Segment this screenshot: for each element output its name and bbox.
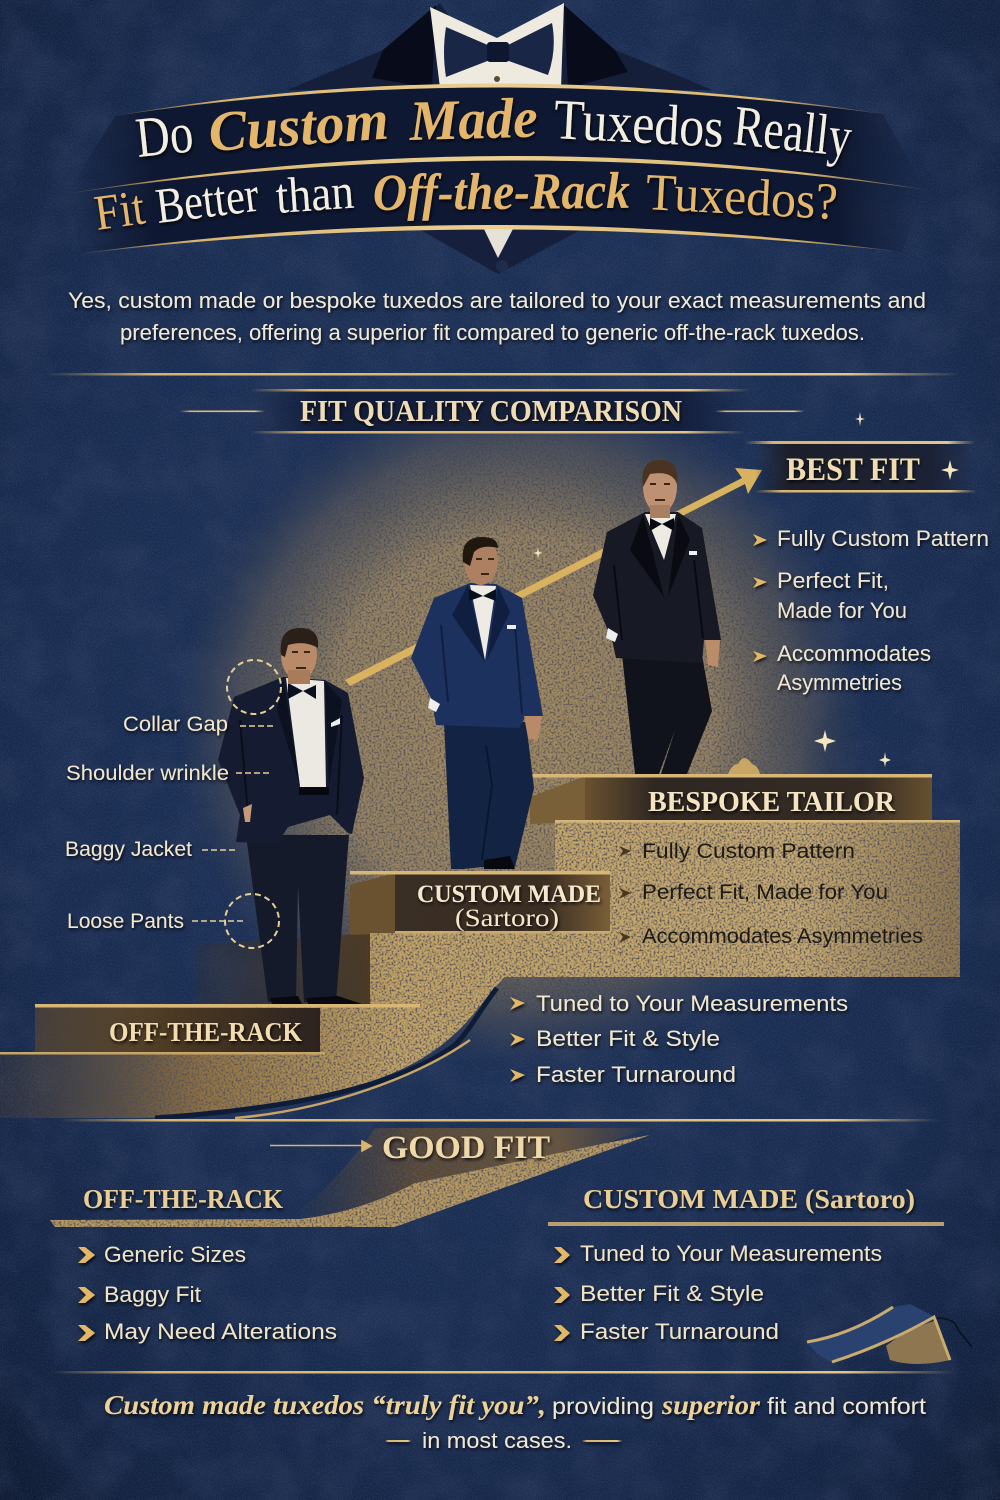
bottom divider — [50, 1371, 955, 1374]
list: Baggy Fit — [104, 1282, 201, 1307]
custom made list: Faster Turnaround — [536, 1062, 736, 1087]
title text: Fit — [91, 178, 148, 241]
labels: Collar Gap — [123, 713, 228, 736]
step: bespoke tailor — [530, 774, 960, 822]
closing statement: superior — [661, 1390, 761, 1420]
rising arrow — [345, 468, 762, 686]
panel: off-the-rack comparison — [78, 1184, 337, 1344]
lapels — [452, 585, 510, 662]
custom made list — [510, 991, 848, 1087]
shirt — [470, 585, 496, 660]
sleeve seams — [441, 625, 522, 714]
best fit list — [753, 526, 989, 695]
list: May Need Alterations — [104, 1319, 337, 1344]
lapels — [277, 677, 342, 786]
stone staircase — [0, 758, 960, 1118]
labels: Baggy Jacket — [65, 838, 192, 861]
step: off-the-rack: OFF-THE-RACK — [109, 1017, 302, 1047]
curved gold edge — [155, 988, 497, 1118]
head — [464, 537, 498, 585]
jacket button — [496, 260, 508, 272]
leader dashes — [192, 726, 275, 921]
best fit list: Made for You — [777, 598, 907, 623]
title text — [91, 87, 855, 241]
ornament — [728, 758, 760, 774]
closing statement: providing — [552, 1393, 654, 1419]
title text: Tuxedos? — [644, 164, 839, 231]
figure: off-the-rack man — [218, 628, 364, 1004]
title text: Tuxedos — [552, 88, 725, 160]
back step — [195, 933, 370, 1005]
shirt collar — [430, 3, 564, 88]
jacket — [593, 512, 721, 663]
list: Generic Sizes — [104, 1242, 246, 1267]
step: custom made — [350, 871, 610, 934]
best fit list: Perfect Fit, — [777, 568, 889, 593]
intro paragraph: Yes, custom made or bespoke tuxedos are tailored to your exact measurements and — [68, 288, 926, 313]
pocket square — [689, 551, 697, 555]
title text: Custom — [207, 89, 390, 164]
top divider — [45, 373, 960, 376]
shoes — [484, 856, 515, 869]
closing statement: Custom made tuxedos “truly fit you”, — [104, 1390, 546, 1420]
step: bespoke tailor: BESPOKE TAILOR — [648, 786, 896, 818]
step: off-the-rack — [0, 1004, 420, 1054]
fit flaw callouts — [65, 660, 281, 948]
shirt — [286, 678, 326, 787]
figure: bespoke man — [593, 460, 721, 774]
intro paragraph — [68, 288, 926, 345]
title text: Off-the-Rack — [373, 163, 630, 222]
bow tie — [444, 23, 554, 77]
title text: Do — [133, 101, 196, 170]
labels: Loose Pants — [67, 910, 184, 933]
swoosh — [290, 1128, 650, 1219]
title banner — [65, 83, 927, 254]
lapels — [372, 5, 628, 88]
labels: Shoulder wrinkle — [66, 762, 229, 785]
neck — [288, 670, 310, 684]
list: Better Fit & Style — [580, 1281, 764, 1306]
bow tie — [288, 683, 316, 699]
sleeve seams — [614, 560, 703, 640]
title text: Better — [153, 166, 262, 234]
hand — [705, 640, 720, 667]
panel: custom made comparison: CUSTOM MADE (Sartoro) — [583, 1184, 915, 1214]
closing statement: in most cases. — [422, 1428, 572, 1453]
shirt — [645, 514, 676, 560]
hand — [524, 716, 542, 740]
tuxedo illustration — [287, 3, 712, 274]
stone mass — [0, 822, 960, 1118]
lapels — [630, 514, 690, 597]
bow tie — [469, 589, 496, 601]
labels — [65, 713, 229, 933]
intro paragraph: preferences, offering a superior fit compared to generic off-the-rack tuxedos. — [120, 320, 865, 345]
list — [78, 1242, 337, 1344]
bespoke list — [619, 840, 923, 948]
shirt front — [482, 225, 515, 258]
bespoke list: Perfect Fit, Made for You — [642, 881, 888, 904]
list bullets — [619, 846, 631, 943]
hair — [281, 628, 318, 657]
shoes — [270, 996, 362, 1004]
arrow — [270, 1141, 371, 1151]
ribbon — [67, 85, 925, 253]
pants — [622, 655, 712, 774]
shirt stud — [494, 76, 500, 82]
panel: off-the-rack comparison: OFF-THE-RACK — [83, 1184, 283, 1214]
best fit banner — [745, 441, 977, 492]
best fit list: Asymmetries — [777, 670, 902, 695]
list bullets — [510, 997, 525, 1082]
hair — [642, 460, 677, 487]
bespoke list: Fully Custom Pattern — [642, 840, 855, 863]
lower jacket — [412, 225, 590, 274]
neck — [650, 505, 670, 518]
best fit banner: BEST FIT — [786, 452, 920, 488]
ribbon gold lines — [65, 83, 927, 254]
bespoke list: Accommodates Asymmetries — [642, 925, 923, 948]
sleeve seams — [240, 715, 342, 815]
list: Tuned to Your Measurements — [580, 1241, 882, 1266]
lower divider — [60, 1119, 940, 1122]
custom made list: Better Fit & Style — [536, 1026, 720, 1051]
jacket — [411, 583, 543, 728]
bow tie — [650, 518, 674, 531]
pants — [246, 835, 349, 1002]
face — [292, 652, 310, 668]
section heading: FIT QUALITY COMPARISON — [300, 393, 682, 428]
good fit heading: GOOD FIT — [382, 1130, 550, 1166]
jacket shoulders — [287, 3, 712, 90]
step: custom made: (Sartoro) — [455, 905, 559, 932]
panel: custom made comparison — [548, 1184, 944, 1344]
hair — [463, 537, 498, 566]
best fit list: Accommodates — [777, 641, 931, 666]
head — [281, 630, 317, 680]
face — [650, 484, 670, 500]
list — [554, 1241, 882, 1344]
closing statement — [104, 1390, 927, 1453]
title text: Made — [408, 87, 538, 153]
jacket — [218, 677, 364, 844]
closing statement: fit and comfort — [767, 1393, 927, 1419]
figure: custom made man — [411, 537, 543, 869]
icon: tuxedo shoes — [807, 1304, 972, 1364]
pocket square — [507, 625, 516, 629]
custom made list: Tuned to Your Measurements — [536, 991, 848, 1016]
head — [643, 461, 677, 513]
pants — [444, 722, 534, 869]
star sparkles — [533, 412, 959, 767]
section heading — [180, 389, 805, 434]
pant crease — [482, 745, 492, 860]
face — [476, 559, 494, 574]
best fit list: Fully Custom Pattern — [777, 526, 989, 551]
hand — [243, 804, 252, 822]
step: custom made: CUSTOM MADE — [417, 881, 601, 908]
list bullets — [753, 534, 767, 662]
cuff — [606, 628, 618, 642]
title text: Really — [731, 94, 855, 169]
good fit heading — [50, 1128, 650, 1227]
dashed circles — [225, 660, 281, 948]
list: Faster Turnaround — [580, 1319, 779, 1344]
cuff — [428, 698, 440, 712]
gold glow backdrop — [175, 380, 865, 1070]
belt — [299, 787, 329, 795]
title text: than — [274, 163, 356, 224]
pocket square — [331, 718, 340, 727]
